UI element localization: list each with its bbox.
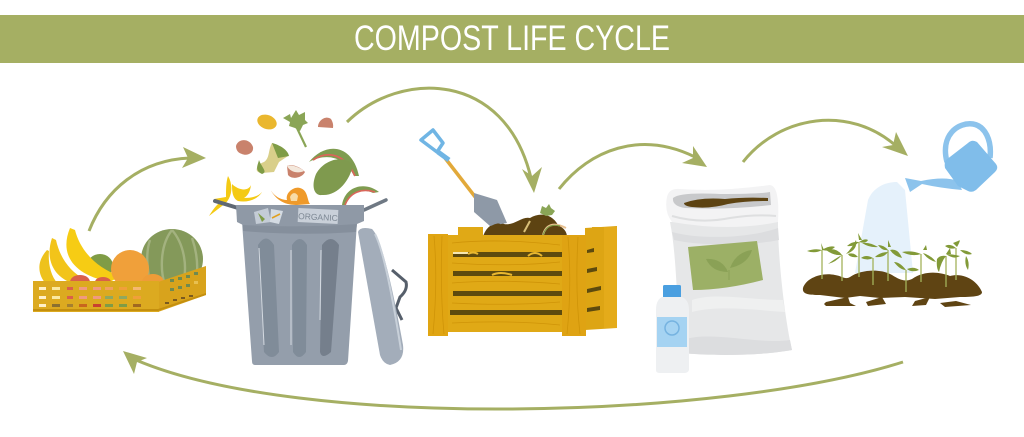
bin lid xyxy=(358,228,403,365)
bag label xyxy=(688,241,763,290)
basket front xyxy=(33,281,159,312)
bananas xyxy=(66,228,120,282)
right handle xyxy=(364,200,386,210)
orange xyxy=(111,250,149,288)
crate side xyxy=(585,226,617,330)
soil xyxy=(803,271,982,299)
arrow: food to bin xyxy=(89,147,206,231)
crate posts xyxy=(428,234,448,336)
basket holes xyxy=(39,272,198,307)
apple xyxy=(87,254,113,278)
watering stream xyxy=(855,182,913,273)
bin rim xyxy=(236,205,364,226)
eggshells xyxy=(236,140,253,155)
watermelon rind 2 xyxy=(342,186,379,205)
seedlings xyxy=(822,242,956,292)
can handle xyxy=(945,124,990,162)
fruit basket xyxy=(33,228,206,312)
crate front xyxy=(448,235,564,332)
sprig xyxy=(540,204,555,216)
watering can xyxy=(905,124,997,192)
compost bin xyxy=(215,200,406,365)
title: COMPOST LIFE CYCLE xyxy=(354,19,670,58)
soil xyxy=(684,198,768,208)
can body xyxy=(945,141,997,192)
left handle xyxy=(215,201,238,208)
arrow: bin to crate xyxy=(347,88,542,193)
food scraps xyxy=(209,110,379,216)
orange peel xyxy=(270,188,310,205)
lid handle xyxy=(392,270,406,320)
arrow: bag to seedlings xyxy=(743,120,908,162)
slots xyxy=(450,248,601,315)
bag opening xyxy=(673,192,771,209)
watermelon xyxy=(141,229,203,289)
can spout xyxy=(905,178,962,192)
watermelon leaf piece xyxy=(314,159,353,195)
grooves xyxy=(258,238,339,357)
arrow: crate to bag xyxy=(559,145,707,189)
soil puddles xyxy=(824,297,971,307)
basket side xyxy=(158,266,206,312)
banana peel xyxy=(209,176,262,216)
bin body xyxy=(242,222,357,365)
organic label: ORGANIC xyxy=(298,211,338,223)
sticker xyxy=(254,208,283,224)
title banner xyxy=(0,15,1024,63)
wood grain xyxy=(433,236,580,334)
wooden compost crate xyxy=(421,130,617,336)
soil with seedlings xyxy=(803,233,982,307)
crate back xyxy=(458,227,617,240)
watermelon rind 1 xyxy=(309,149,359,176)
shovel xyxy=(421,130,507,236)
herb sprig xyxy=(283,110,308,147)
arrow: seedlings back to food xyxy=(123,351,903,409)
bag body xyxy=(670,222,792,355)
fertiliser bag xyxy=(656,185,792,373)
bottle xyxy=(656,285,689,373)
apple core xyxy=(257,143,288,173)
chip peel xyxy=(255,112,279,132)
bag cuff xyxy=(666,185,778,227)
compost mound xyxy=(483,215,567,237)
